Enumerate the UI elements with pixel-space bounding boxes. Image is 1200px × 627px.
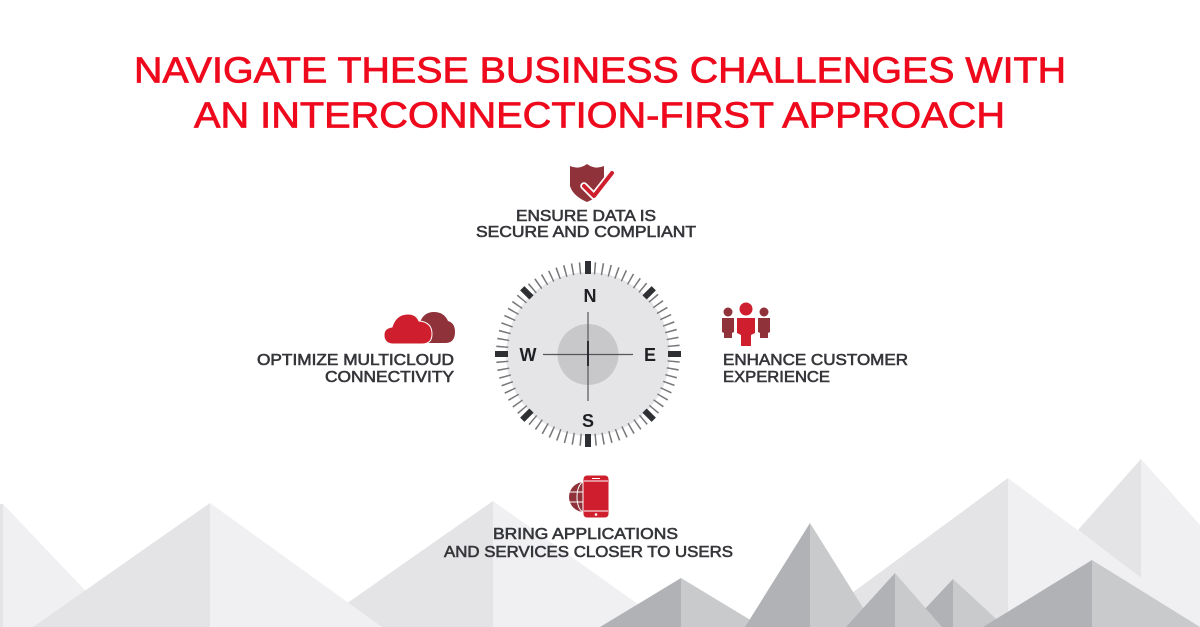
label: enhance customer: EXPERIENCE — [723, 369, 830, 386]
label: bring applications: AND SERVICES CLOSER TO USERS — [444, 544, 733, 561]
globe — [569, 482, 599, 512]
compass centre disc — [558, 324, 618, 385]
mountain background — [0, 459, 1200, 627]
compass minor ticks — [502, 268, 674, 440]
label: ensure data: SECURE AND COMPLIANT — [476, 224, 697, 241]
compass major ticks — [495, 261, 681, 447]
mountain: centre light peak — [313, 501, 670, 627]
compass letters: N — [584, 286, 596, 306]
title: AN INTERCONNECTION-FIRST APPROACH — [194, 94, 1005, 136]
icon: shield with check mark — [570, 164, 612, 202]
icon: two clouds — [384, 312, 455, 344]
mountain: far left light peak — [0, 504, 120, 627]
mountain: far right light peak — [1078, 459, 1200, 627]
mountain: left large light peak — [33, 503, 382, 627]
mountain: back dark peak — [908, 579, 1005, 627]
compass letters — [520, 286, 656, 431]
title: NAVIGATE THESE BUSINESS CHALLENGES WITH — [134, 50, 1066, 90]
phone — [583, 475, 609, 518]
mountain: small dark peak — [600, 578, 762, 627]
label: optimize multicloud: CONNECTIVITY — [325, 369, 455, 386]
mountain: large right light peak — [806, 478, 1200, 627]
compass letters: S — [582, 411, 594, 431]
compass letters: W — [520, 345, 536, 365]
label: enhance customer — [723, 352, 908, 386]
compass — [495, 261, 681, 447]
label: optimize multicloud — [257, 352, 455, 386]
compass letters: E — [644, 345, 656, 365]
mountain: middle dark peak — [846, 573, 942, 627]
label: ensure data — [476, 208, 697, 241]
icon: three people — [722, 302, 770, 346]
mountain: tall dark peak — [745, 523, 875, 627]
label: optimize multicloud: OPTIMIZE MULTICLOUD — [257, 352, 454, 369]
label: enhance customer: ENHANCE CUSTOMER — [723, 352, 908, 369]
label: bring applications — [444, 526, 733, 561]
compass dial — [506, 272, 670, 436]
label: bring applications: BRING APPLICATIONS — [493, 526, 678, 543]
mountain: right dark peak — [983, 560, 1200, 627]
compass cross hairs — [543, 312, 633, 401]
title — [134, 50, 1066, 136]
label: ensure data: ENSURE DATA IS — [516, 208, 656, 225]
icon: globe and phone — [569, 475, 609, 518]
